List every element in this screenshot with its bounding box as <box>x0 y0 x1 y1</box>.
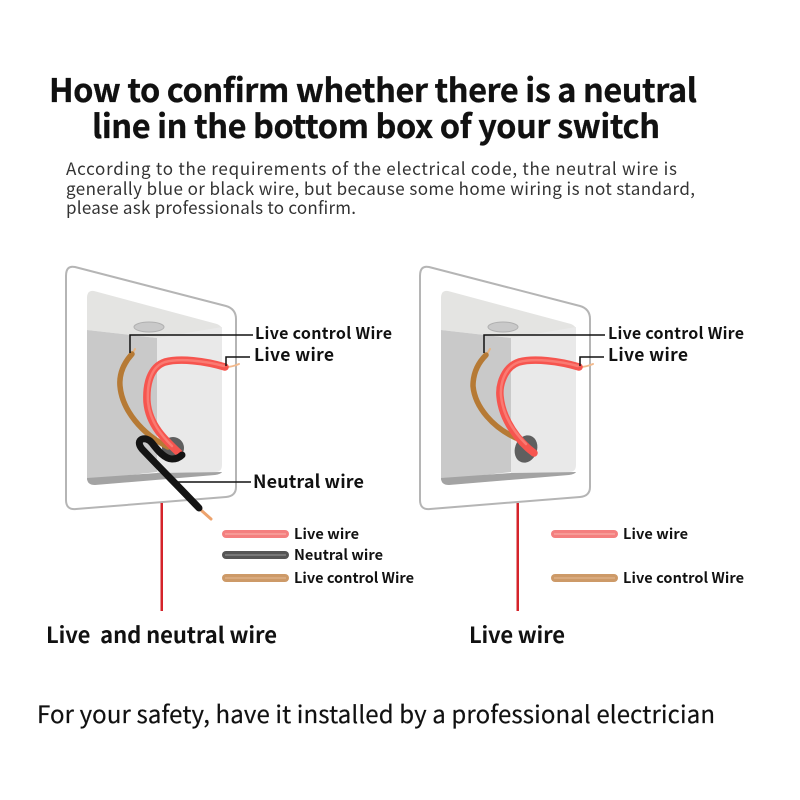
label: live wire: Live wire <box>254 342 334 367</box>
legend: live wire <box>222 523 359 544</box>
legend: live control wire <box>222 567 414 588</box>
caption: live wire: Live wire <box>469 618 565 650</box>
label: neutral wire: Neutral wire <box>253 468 364 494</box>
legend: neutral wire <box>222 544 383 565</box>
box bottom edge <box>87 472 222 485</box>
legend right <box>551 523 744 588</box>
legend: live control wire <box>551 567 744 588</box>
title <box>49 65 697 148</box>
red divider left <box>160 503 163 611</box>
legend: live control wire: Live control Wire <box>294 567 414 588</box>
intro text block: According to the requirements of the electrical code, the neutral wire is <box>66 155 677 180</box>
label: live wire: Live wire <box>608 342 688 367</box>
intro text block: please ask professionals to confirm. <box>66 194 356 219</box>
screw hole top <box>488 322 518 332</box>
cable hole <box>162 437 184 459</box>
box top face <box>87 291 222 338</box>
leader line: live wire <box>580 357 604 366</box>
box right face <box>511 327 576 473</box>
footer safety note: For your safety, have it installed by a professional electrician <box>37 695 715 730</box>
legend: live wire <box>551 523 688 544</box>
legend: live control wire: Live control Wire <box>623 567 744 588</box>
box right face <box>157 327 222 473</box>
black neutral wire <box>139 439 211 519</box>
leader line: live wire <box>226 357 250 366</box>
brown live control wire <box>473 349 516 438</box>
cable hole <box>511 432 541 466</box>
leader line: live control wire <box>484 335 605 353</box>
title: line in the bottom box of your switch <box>92 101 660 148</box>
intro text block: generally blue or black wire, but because some home wiring is not standard, <box>66 175 695 200</box>
legend: neutral wire: Neutral wire <box>294 544 383 565</box>
box left face <box>87 330 157 480</box>
caption: live and neutral wire: Live and neutral wire <box>46 618 277 650</box>
label: live control wire: Live control Wire <box>608 320 744 344</box>
intro text block <box>66 155 695 219</box>
wall plate <box>66 267 236 509</box>
panel: live and neutral wire box <box>66 267 392 519</box>
brown live control wire <box>120 349 168 447</box>
screw hole top <box>134 322 164 332</box>
red divider right <box>516 503 519 611</box>
legend: live wire: Live wire <box>623 523 688 544</box>
leader line: live control wire <box>130 335 253 353</box>
box left face <box>441 330 511 480</box>
red live wire <box>147 360 239 453</box>
wall plate <box>420 267 590 509</box>
legend left <box>222 523 414 588</box>
box top face <box>441 291 576 338</box>
legend: live wire: Live wire <box>294 523 359 544</box>
box bottom edge <box>441 472 576 485</box>
title: How to confirm whether there is a neutral <box>49 65 697 112</box>
panel: live wire box <box>420 267 744 509</box>
red live wire <box>500 360 593 453</box>
label: live control wire: Live control Wire <box>255 320 392 344</box>
leader line: neutral wire <box>178 481 251 483</box>
